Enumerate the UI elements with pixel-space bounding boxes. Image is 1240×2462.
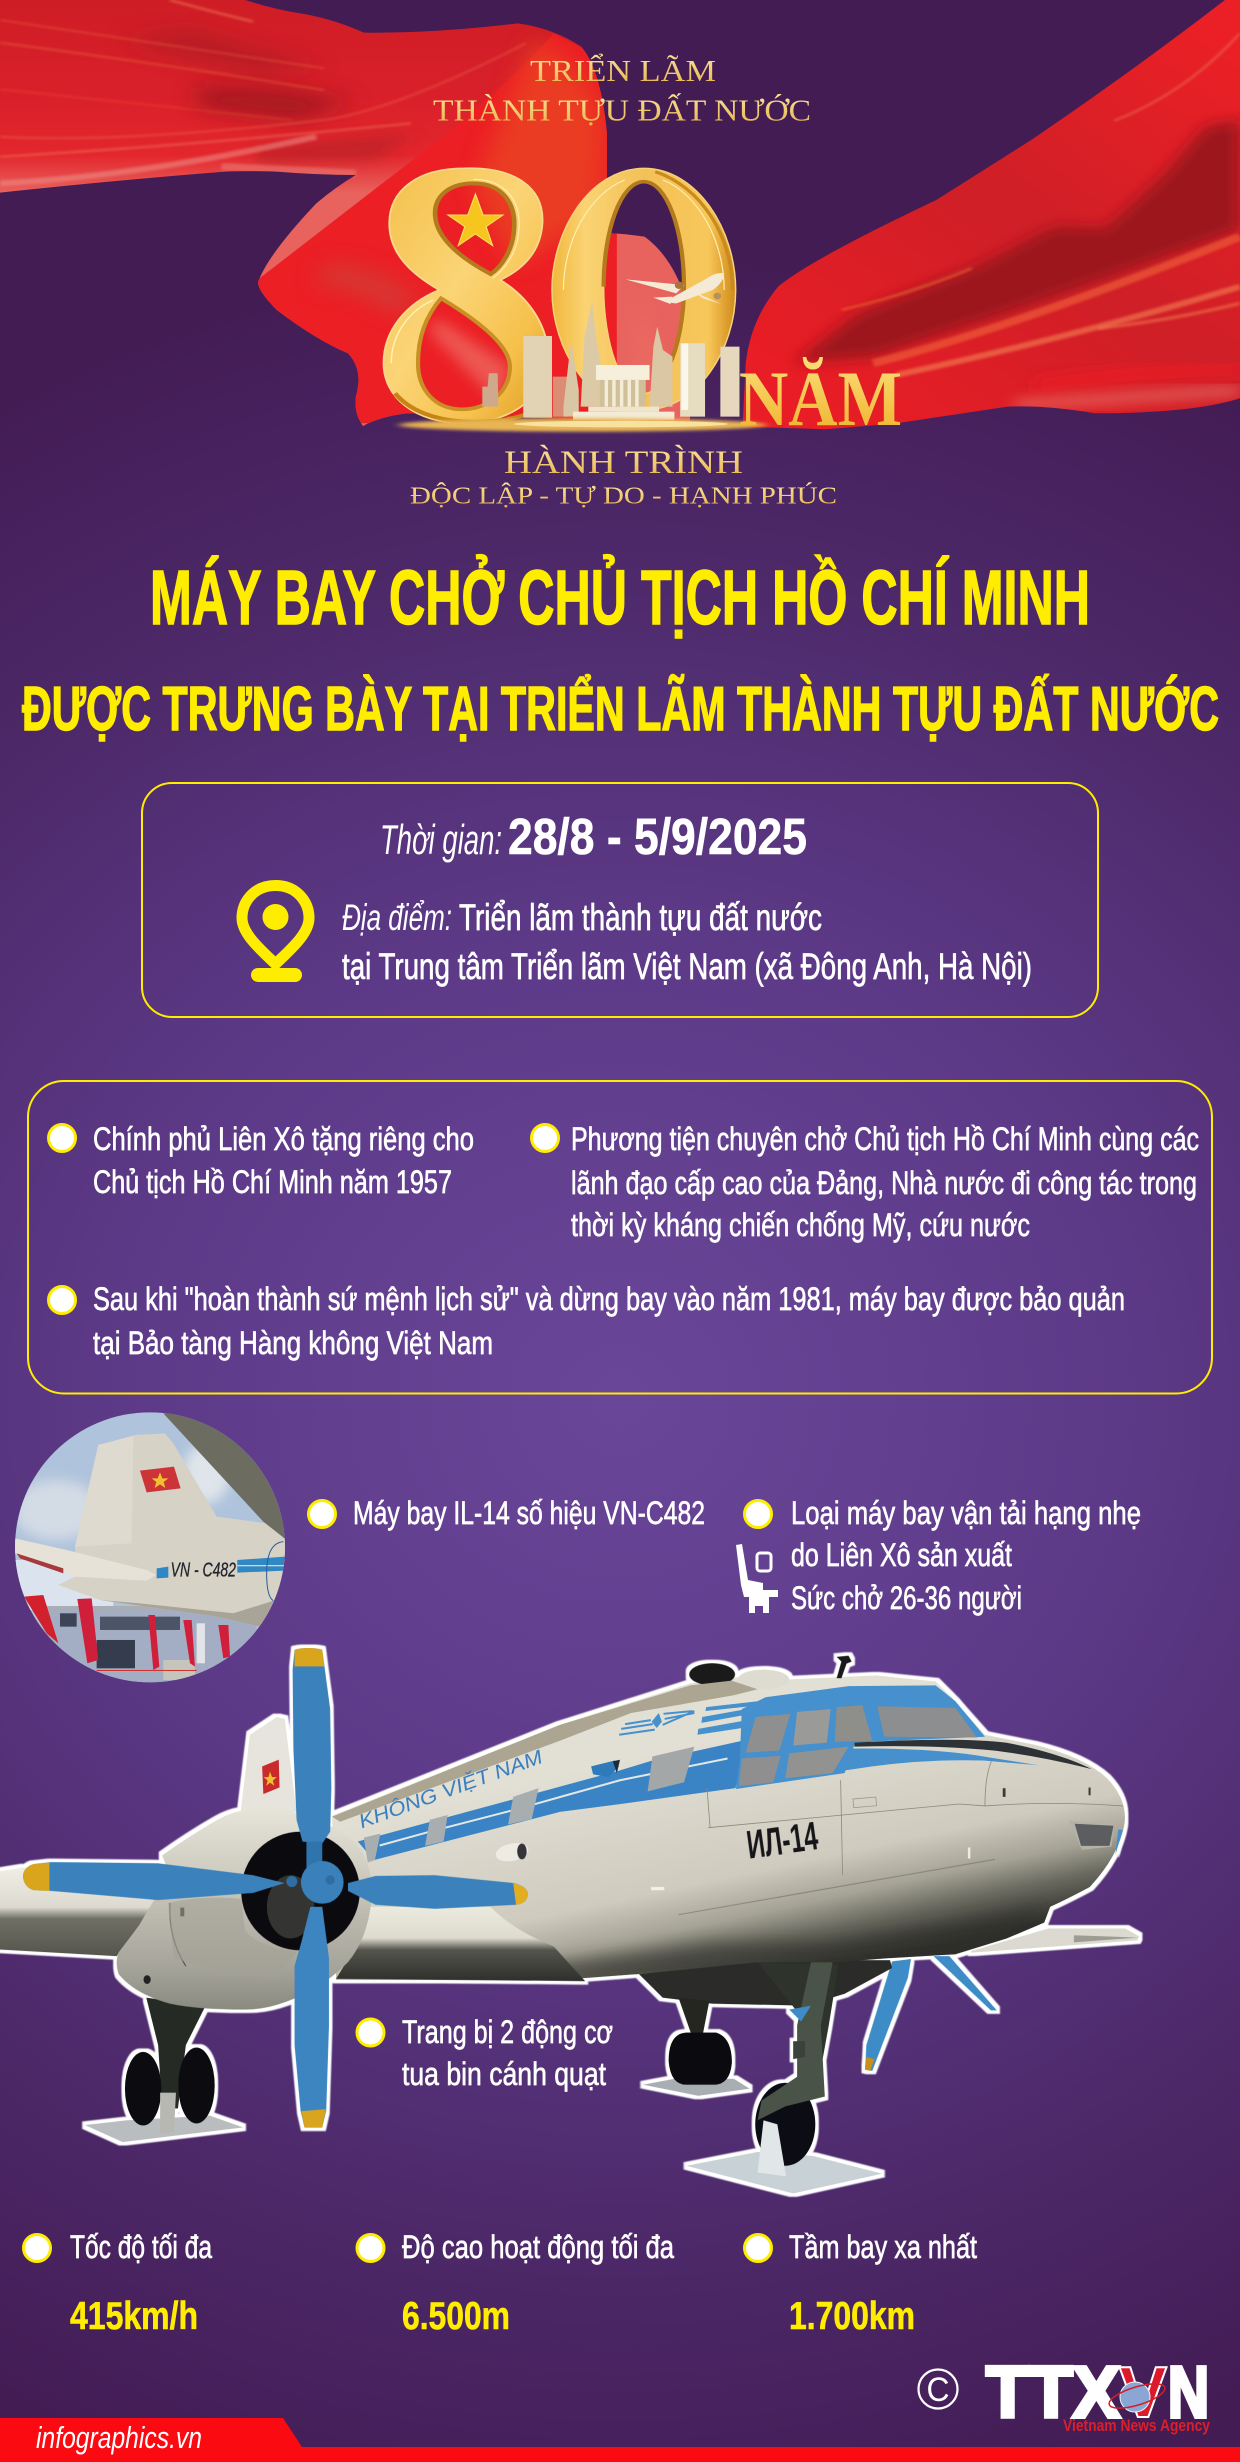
fact: preserved: tại Bảo tàng Hàng không Việt Nam [93, 1325, 493, 1361]
icon: location pin [242, 886, 309, 982]
exhibition heading: TRIỂN LÃM [530, 53, 716, 88]
copyright mark: C [926, 2371, 950, 2409]
icon: small airliner [625, 273, 724, 304]
label: engines: tua bin cánh quạt [402, 2056, 606, 2092]
type mark: ИЛ-14 [744, 1814, 821, 1867]
fact: transport [532, 1121, 1199, 1243]
landing gear: nose side [639, 1960, 892, 2193]
belly shadow [560, 1911, 1031, 1978]
wing root [336, 1907, 585, 1981]
blade: left [23, 1862, 285, 1900]
blue cheatlines [358, 1739, 1044, 1986]
label: engines: Trang bị 2 động cơ [402, 2014, 613, 2050]
digit 0 [552, 168, 736, 410]
fuselage [332, 1656, 1125, 1986]
place: Địa điểm: [342, 897, 452, 938]
fact: gift: Chính phủ Liên Xô tặng riêng cho [93, 1121, 474, 1157]
panel: key facts [28, 1081, 1212, 1394]
logo: TTXVN: N [1168, 2353, 1209, 2433]
stat: max altitude: Độ cao hoạt động tối đa [402, 2229, 675, 2265]
tail fin with flag [240, 1717, 297, 1814]
photo: aircraft tail [13, 1410, 287, 1683]
skyline with mausoleum [399, 302, 766, 432]
fact: preserved [48, 1281, 1125, 1361]
blade: right [348, 1875, 528, 1909]
icon: passenger seat [736, 1544, 778, 1613]
pitot housing [494, 1840, 530, 1864]
photo: aircraft tail: VN - C482 [171, 1559, 236, 1582]
panel: time and place [142, 783, 1098, 1017]
exhibition heading [433, 53, 811, 128]
wing badge [619, 1711, 694, 1735]
airline name: KHÔNG VIỆT NAM [356, 1745, 546, 1833]
landing gear: left [85, 1998, 243, 2142]
label: engines [357, 2014, 613, 2092]
ribbon: left and center [0, 0, 690, 426]
ribbon: right [743, 0, 1240, 429]
exhibition heading: THÀNH TỰU ĐẤT NƯỚC [433, 92, 811, 128]
label: aircraft type: do Liên Xô sản xuất [791, 1537, 1012, 1573]
text: độc lập tự do hạnh phúc: ĐỘC LẬP - TỰ DO - HẠNH PHÚC [410, 482, 837, 510]
nose panel lines [707, 1760, 1123, 1875]
emblem: golden 80 years [384, 168, 766, 432]
place: tại Trung tâm Triển lãm Việt Nam (xã Đông Anh, Hà Nội) [342, 946, 1032, 987]
dorsal radome and mast [689, 1656, 852, 1689]
footer bar with source: infographics.vn [36, 2420, 202, 2455]
stat: top speed: Tốc độ tối đa [70, 2229, 213, 2265]
stat: max altitude [357, 2229, 675, 2338]
far side propeller and wing [865, 1929, 1139, 2071]
time: Thời gian: [380, 816, 502, 863]
engine nacelle [117, 1806, 372, 2010]
text: NĂM: NĂM [739, 355, 902, 442]
stat: max range: Tầm bay xa nhất [789, 2229, 977, 2265]
logo: TTXVN: Vietnam News Agency [1063, 2416, 1210, 2435]
roof fairing [332, 1681, 758, 1822]
label: aircraft code [308, 1495, 705, 1531]
logo: TTXVN: TTX [986, 2353, 1120, 2433]
main title [22, 554, 1219, 744]
red ribbons banner [0, 0, 1240, 429]
star [448, 194, 503, 246]
fact: transport: thời kỳ kháng chiến chống Mỹ, cứu nước [571, 1207, 1030, 1243]
stat: max altitude: 6.500m [402, 2295, 510, 2338]
time: 28/8 - 5/9/2025 [508, 808, 807, 865]
blade: down [295, 1907, 329, 2127]
footer bar with source [0, 2418, 1240, 2462]
stat: max range: 1.700km [789, 2295, 915, 2338]
near wing [0, 1867, 170, 1956]
hub [306, 1842, 322, 1869]
label: aircraft type: Loại máy bay vận tải hạng nhẹ [791, 1495, 1141, 1531]
small details [853, 1797, 877, 1808]
place [342, 897, 1032, 987]
logo: TTXVN: V [1119, 2353, 1167, 2433]
copyright mark [918, 2370, 958, 2409]
label: aircraft type: Sức chở 26-36 người [791, 1580, 1022, 1616]
fact: gift [48, 1121, 474, 1200]
stat: top speed: 415km/h [70, 2295, 198, 2338]
near propeller [23, 1648, 528, 2127]
label: aircraft type [744, 1495, 1141, 1616]
stat: max range [744, 2229, 977, 2338]
digit 8 [384, 168, 548, 423]
cockpit [619, 1685, 1123, 1915]
logo: TTXVN [986, 2353, 1210, 2435]
chin window [1069, 1821, 1114, 1850]
label: aircraft code: Máy bay IL-14 số hiệu VN-C482 [353, 1495, 705, 1531]
text: hành trình: HÀNH TRÌNH [504, 444, 743, 481]
time [380, 808, 807, 865]
stat: top speed [24, 2229, 213, 2338]
blade: up [293, 1648, 331, 1844]
place: Triển lãm thành tựu đất nước [459, 897, 822, 938]
fact: gift: Chủ tịch Hồ Chí Minh năm 1957 [93, 1164, 452, 1200]
engine intake [241, 1832, 360, 1950]
aircraft IL-14 illustration [0, 1648, 1139, 2193]
